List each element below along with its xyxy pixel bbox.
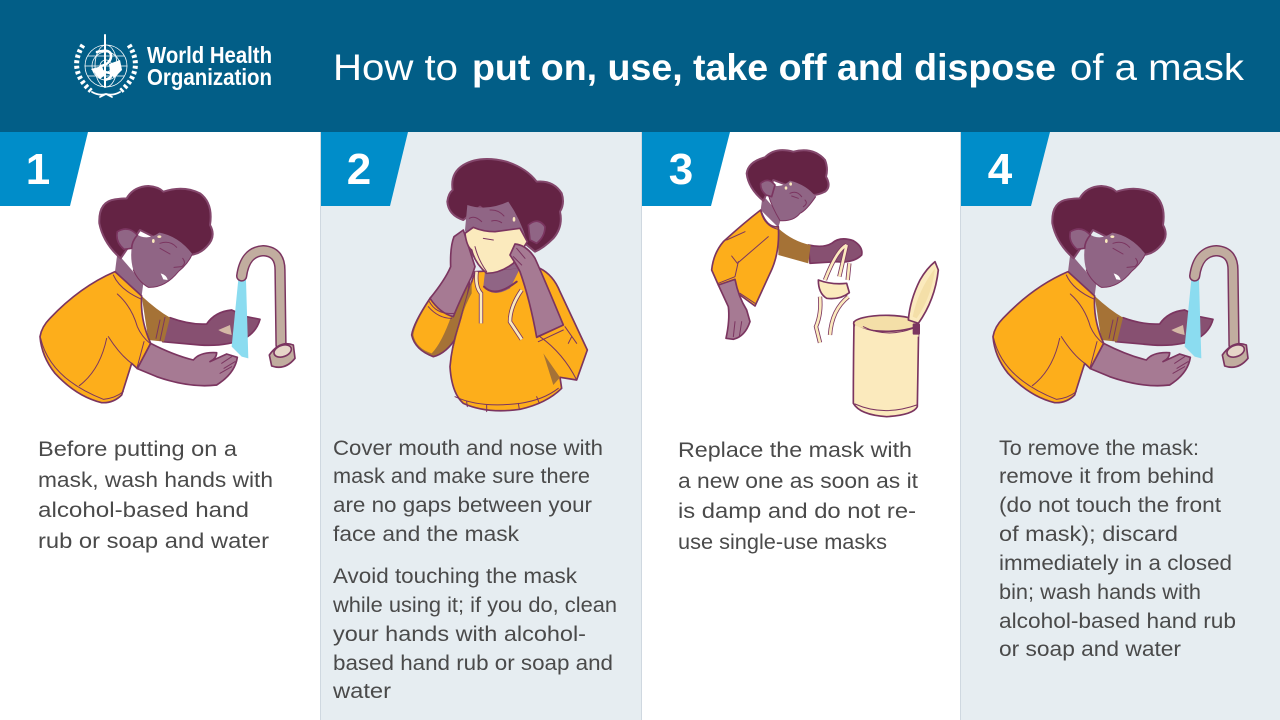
logo wordmark: World Health: [147, 42, 272, 68]
panel: step 2: [320, 132, 641, 720]
step 4 number tab: [961, 132, 1050, 206]
step 4 text: or soap and water: [999, 638, 1181, 661]
illustration: washing hands at tap again: [993, 186, 1248, 403]
panel: step 1: [0, 132, 320, 720]
step 2 number tab: 2: [347, 145, 371, 194]
step 4 text: immediately in a closed: [999, 552, 1232, 575]
step 3 text: [678, 439, 918, 554]
step 2 text: are no gaps between your: [333, 494, 592, 517]
step 2 text: your hands with alcohol-: [333, 623, 586, 646]
step 4 text: To remove the mask:: [999, 437, 1199, 460]
title: How to: [333, 47, 458, 88]
step 1 number tab: [0, 132, 88, 206]
step 4 text: of mask); discard: [999, 523, 1178, 546]
step 2 text: while using it; if you do, clean: [332, 594, 617, 617]
step 1 text: [38, 438, 273, 553]
step 3 text: a new one as soon as it: [678, 470, 918, 493]
header band: [0, 0, 1280, 132]
step 1 text: alcohol-based hand: [38, 499, 249, 522]
illustration: washing hands at tap: [40, 186, 295, 403]
step 1 text: mask, wash hands with: [38, 469, 273, 492]
illustration: discarding mask in bin: [712, 150, 938, 417]
step 4 text: bin; wash hands with: [999, 581, 1201, 604]
logo wordmark: [147, 42, 272, 90]
WHO logo: [77, 35, 272, 97]
title: put on, use, take off and dispose: [472, 47, 1056, 88]
step 3 number tab: [642, 132, 730, 206]
step 1 text: Before putting on a: [38, 438, 237, 461]
step 3 text: is damp and do not re-: [678, 500, 916, 523]
title: [333, 47, 1245, 88]
step 2 number tab: [321, 132, 408, 206]
step 2 text: water: [332, 680, 391, 703]
title: of a mask: [1070, 47, 1245, 88]
step 4 text: alcohol-based hand rub: [999, 610, 1236, 633]
step 4 number tab: 4: [988, 145, 1013, 194]
logo wordmark: Organization: [147, 64, 272, 90]
step 1 number tab: 1: [26, 145, 50, 194]
step 2 text: Cover mouth and nose with: [333, 437, 603, 460]
panel: step 4: [960, 132, 1280, 720]
step 4 text: [999, 437, 1236, 661]
step 2 text: [332, 437, 617, 703]
step 2 text: mask and make sure there: [333, 465, 590, 488]
panel: step 3: [641, 132, 960, 720]
step 4 text: remove it from behind: [999, 465, 1214, 488]
icon: WHO emblem: [77, 35, 135, 97]
illustration: person fitting mask: [412, 159, 587, 412]
step 1 text: rub or soap and water: [38, 530, 269, 553]
step 2 text: based hand rub or soap and: [333, 652, 613, 675]
step 2 text: Avoid touching the mask: [333, 565, 578, 588]
step 3 text: use single-use masks: [678, 531, 887, 554]
step 3 number tab: 3: [669, 145, 693, 194]
step 2 text: face and the mask: [333, 523, 520, 546]
step 3 text: Replace the mask with: [678, 439, 912, 462]
step 4 text: (do not touch the front: [999, 494, 1221, 517]
